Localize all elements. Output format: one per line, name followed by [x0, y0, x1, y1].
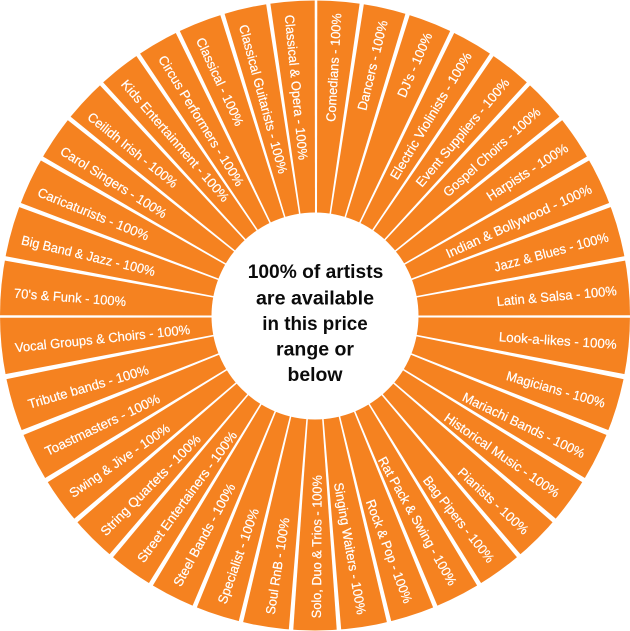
label: Steel Bands: Steel Bands - 100% [170, 481, 239, 589]
label: Historical Music: Historical Music - 100% [441, 410, 563, 501]
central caption: range or [276, 338, 354, 360]
label: Vocal Groups & Choirs: Vocal Groups & Choirs - 100% [14, 322, 191, 355]
label: Gospel Choirs: Gospel Choirs - 100% [440, 104, 544, 200]
label: 70's & Funk: 70's & Funk - 100% [13, 286, 127, 309]
label: Classical & Opera: Classical & Opera - 100% [282, 14, 311, 161]
label: Classical Guitarists: Classical Guitarists - 100% [236, 23, 291, 175]
central white circle [212, 212, 418, 420]
label: Street Entertainers: Street Entertainers - 100% [134, 428, 240, 565]
label: Caricaturists: Caricaturists - 100% [35, 185, 151, 244]
central caption: are available [256, 288, 374, 310]
label: Ceilidh Irish: Ceilidh Irish - 100% [85, 109, 181, 191]
label: Harpists: Harpists - 100% [484, 140, 571, 204]
label: DJ's: DJ's - 100% [394, 30, 435, 100]
label: Swing & Jive: Swing & Jive - 100% [66, 420, 173, 501]
label: Rat Pack & Swing: Rat Pack & Swing - 100% [375, 454, 460, 588]
label: Comedians: Comedians - 100% [323, 13, 344, 122]
label: Indian & Bollywood: Indian & Bollywood - 100% [444, 181, 594, 261]
label: Solo, Duo & Trios: Solo, Duo & Trios - 100% [309, 475, 325, 618]
label: Look-a-likes: Look-a-likes - 100% [498, 329, 617, 352]
label: Classical: Classical - 100% [193, 35, 247, 128]
label: Rock & Pop: Rock & Pop - 100% [363, 497, 415, 606]
label: Pianists: Pianists - 100% [455, 465, 532, 538]
label: String Quartets: String Quartets - 100% [97, 431, 204, 539]
label: Toastmasters: Toastmasters - 100% [42, 391, 163, 459]
label: Kids Entertainment: Kids Entertainment - 100% [118, 77, 232, 205]
label: Specialist: Specialist - 100% [215, 506, 262, 606]
label: Circus Performers: Circus Performers - 100% [155, 53, 247, 189]
label: Soul RnB: Soul RnB - 100% [263, 516, 293, 615]
label: Latin & Salsa: Latin & Salsa - 100% [496, 283, 618, 309]
label: Tribute bands: Tribute bands - 100% [26, 362, 151, 412]
label: Dancers: Dancers - 100% [354, 19, 391, 112]
label: Carol Singers: Carol Singers - 100% [58, 144, 170, 221]
label: Electric Violinists: Electric Violinists - 100% [387, 49, 475, 182]
central caption: in this price [262, 313, 368, 335]
central caption: below [288, 364, 343, 386]
label: Mariachi Bands: Mariachi Bands - 100% [460, 389, 588, 461]
label: Big Band & Jazz: Big Band & Jazz - 100% [20, 233, 157, 279]
central caption [248, 261, 383, 386]
label: Event Suppliers: Event Suppliers - 100% [413, 75, 513, 190]
label: Singing Waiters: Singing Waiters - 100% [331, 481, 369, 616]
central caption: 100% of artists [248, 261, 383, 283]
label: Jazz & Blues: Jazz & Blues - 100% [492, 230, 610, 275]
label: Bag Pipers: Bag Pipers - 100% [420, 473, 498, 566]
label: Magicians: Magicians - 100% [505, 368, 607, 411]
